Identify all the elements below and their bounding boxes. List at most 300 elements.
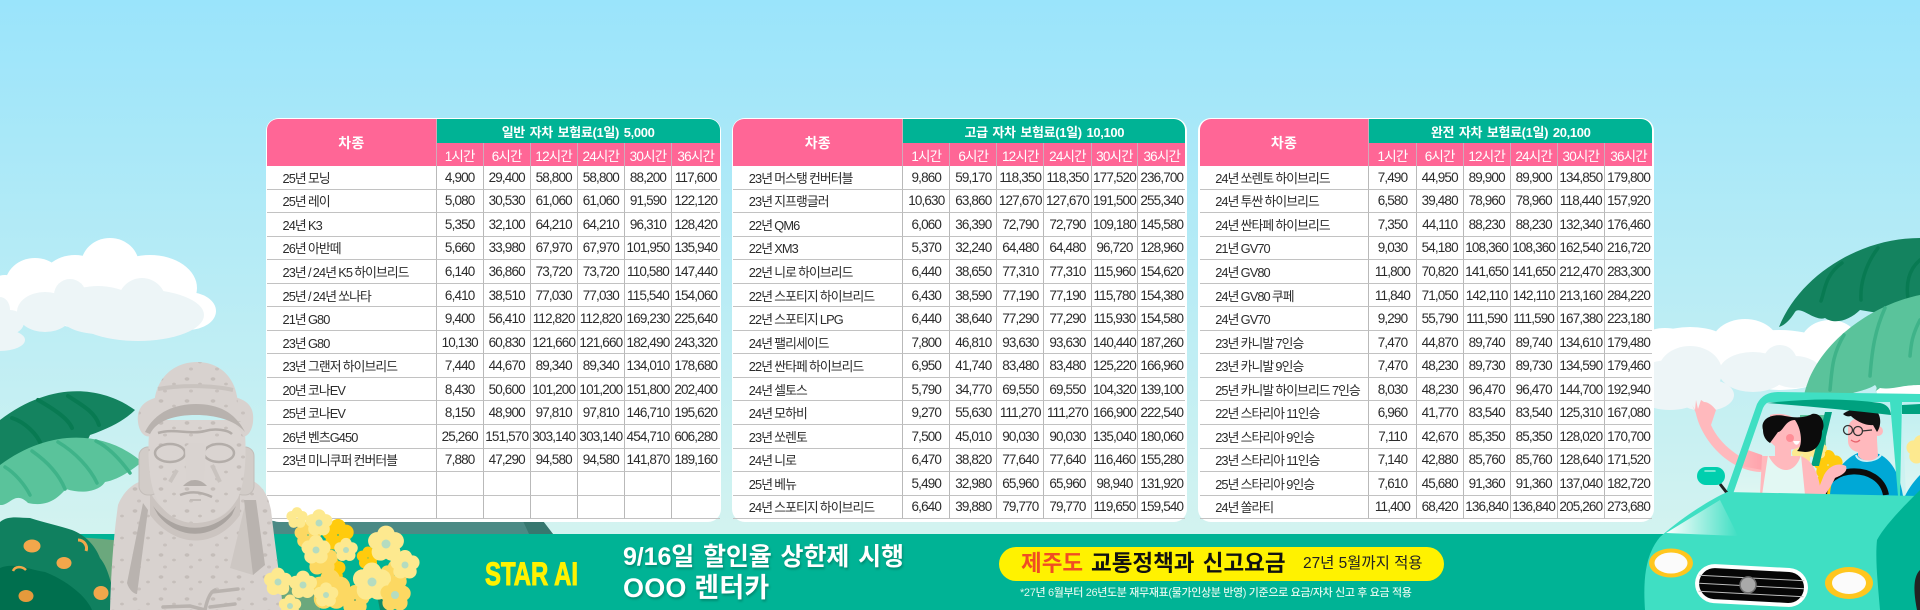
footnote: *27년 6월부터 26년도분 재무재표(물가인상분 반영) 기준으로 요금/자차 신고 후 요금 적용 xyxy=(1020,587,1412,599)
rate rows: full coverage: 89,740 xyxy=(1516,335,1552,350)
rate rows: full coverage: 78,960 xyxy=(1516,193,1552,208)
rate rows: general: 89,340 xyxy=(583,358,619,373)
rate rows: premium: 41,740 xyxy=(955,358,991,373)
rate rows: premium: 32,980 xyxy=(955,476,991,491)
rate rows: full coverage: 91,360 xyxy=(1516,476,1552,491)
rate rows: general: 33,980 xyxy=(489,240,525,255)
rate rows: general: 5,080 xyxy=(445,193,474,208)
table header: full coverage: 24시간 xyxy=(1515,148,1552,164)
rate rows: premium: 72,790 xyxy=(1002,217,1038,232)
rate rows: full coverage: 8,030 xyxy=(1378,382,1407,397)
table header: full coverage: 완전 자차 보험료(1일) 20,100 xyxy=(1431,124,1591,140)
hands xyxy=(163,589,238,610)
rate rows: full coverage: 9,290 xyxy=(1378,311,1407,326)
left clouds xyxy=(0,238,216,351)
rate rows: general: 115,540 xyxy=(627,288,669,302)
rate rows: general: 117,600 xyxy=(675,170,717,185)
rate rows: premium: 63,860 xyxy=(955,193,991,208)
rate rows: premium: 5,490 xyxy=(912,476,941,491)
rate rows: premium: 155,280 xyxy=(1140,452,1183,467)
rate rows: premium: 23년 쏘렌토 xyxy=(749,430,807,445)
rate rows: premium: 93,630 xyxy=(1049,335,1086,350)
body xyxy=(110,478,283,610)
rate rows: full coverage: 108,360 xyxy=(1512,240,1555,255)
rate rows: general: 58,800 xyxy=(583,170,619,185)
rate rows: full coverage: 108,360 xyxy=(1465,240,1508,255)
rate rows: general: 101,200 xyxy=(579,382,622,397)
rate rows: premium: 38,590 xyxy=(955,288,991,302)
left arm band xyxy=(127,503,148,594)
icon: rapeseed flowers xyxy=(264,507,420,610)
rate rows: full coverage: 83,540 xyxy=(1469,405,1505,420)
rate rows: general: 36,860 xyxy=(489,264,525,279)
rate rows: premium: 25년 베뉴 xyxy=(749,477,796,492)
rate rows: general: 61,060 xyxy=(583,193,619,208)
rate rows: premium: 127,670 xyxy=(999,193,1042,208)
rate rows: premium: 38,820 xyxy=(955,452,991,467)
side mirror xyxy=(1697,467,1727,493)
rate rows: premium: 72,790 xyxy=(1049,217,1086,232)
rate rows: full coverage: 11,800 xyxy=(1375,264,1410,279)
rate rows: general: 26년 벤츠G450 xyxy=(282,430,357,445)
rate rows: general: 25년 레이 xyxy=(282,194,330,209)
table header: premium: 1시간 xyxy=(911,148,941,164)
darker fender xyxy=(1876,490,1920,610)
rate rows: premium: 115,930 xyxy=(1094,311,1135,326)
eyes and nose xyxy=(155,444,234,462)
rate rows: premium: 6,950 xyxy=(912,358,941,373)
rate rows: general: 91,590 xyxy=(630,193,666,208)
rate rows: general: 303,140 xyxy=(532,429,575,444)
collar shadow xyxy=(150,492,240,541)
rate rows: premium: 154,620 xyxy=(1140,264,1183,279)
rate rows: premium: 6,060 xyxy=(912,217,941,232)
table header: full coverage: 36시간 xyxy=(1610,148,1647,164)
rate rows: premium: 83,480 xyxy=(1002,358,1038,373)
rate rows: full coverage: 7,110 xyxy=(1378,429,1407,444)
rate rows: premium: 6,440 xyxy=(912,264,941,279)
rate rows: full coverage: 78,960 xyxy=(1469,193,1505,208)
rate rows: premium: 125,220 xyxy=(1093,358,1136,373)
rate rows: full coverage xyxy=(1200,166,1652,519)
rate rows: premium: 24년 니로 xyxy=(749,453,796,468)
rate rows: general: 24년 K3 xyxy=(282,218,322,233)
rate rows: general: 128,420 xyxy=(674,217,717,232)
rate rows: full coverage: 24년 GV80 xyxy=(1215,265,1270,280)
rate rows: full coverage: 7,470 xyxy=(1378,335,1407,350)
rate rows: general: 30,530 xyxy=(489,193,525,208)
table header: full coverage: 6시간 xyxy=(1425,148,1455,164)
left banana leaves xyxy=(0,391,142,505)
rate rows: premium: 10,630 xyxy=(908,193,944,208)
rate rows: full coverage: 23년 스타리아 9인승 xyxy=(1215,430,1314,445)
rate rows: full coverage: 6,960 xyxy=(1378,405,1407,420)
rate rows: premium: 109,180 xyxy=(1093,217,1136,232)
rate rows: general: 303,140 xyxy=(579,429,622,444)
rate rows: general: 5,660 xyxy=(445,240,474,255)
rate rows: full coverage: 42,670 xyxy=(1422,429,1458,444)
steering wheel xyxy=(1824,471,1886,495)
rate rows: full coverage: 89,730 xyxy=(1469,358,1505,373)
rate rows: general: 23년 그랜저 하이브리드 xyxy=(282,359,397,374)
rate rows: general: 5,350 xyxy=(445,217,474,232)
rate rows: full coverage: 6,580 xyxy=(1378,193,1407,208)
rate rows: full coverage: 44,870 xyxy=(1422,335,1458,350)
rate rows: full coverage: 141,650 xyxy=(1465,264,1508,279)
rate rows: premium: 22년 싼타페 하이브리드 xyxy=(749,359,863,374)
rate rows: premium: 98,940 xyxy=(1096,476,1133,491)
rate rows: full coverage: 88,230 xyxy=(1469,217,1505,232)
rate rows: premium: 6,440 xyxy=(912,311,941,326)
table header: general xyxy=(267,119,720,166)
rate rows: general: 25년 모닝 xyxy=(282,171,330,186)
rate rows: premium: 159,540 xyxy=(1140,499,1183,514)
rate rows: premium: 180,060 xyxy=(1140,429,1183,444)
rate rows: general: 73,720 xyxy=(583,264,619,279)
rate rows: premium: 65,960 xyxy=(1002,476,1038,491)
rate rows: full coverage: 41,770 xyxy=(1422,405,1458,420)
rate rows: general: 121,660 xyxy=(532,335,575,350)
rate rows: general: 23년 / 24년 K5 하이브리드 xyxy=(282,265,409,280)
rate rows: premium: 6,430 xyxy=(912,288,941,302)
rate rows: premium: 9,270 xyxy=(912,405,941,420)
table header: general: 24시간 xyxy=(582,148,619,164)
rate rows: full coverage: 24년 GV70 xyxy=(1215,312,1270,327)
rate rows: premium: 116,460 xyxy=(1094,452,1135,467)
low hill on the left xyxy=(70,537,320,610)
rate rows: full coverage: 71,050 xyxy=(1422,288,1458,302)
right headlight xyxy=(1825,567,1873,599)
rate rows: full coverage: 170,700 xyxy=(1607,429,1650,444)
rate rows: general: 38,510 xyxy=(489,288,525,302)
rate rows: premium: 77,310 xyxy=(1049,264,1086,279)
deep yellow blossoms xyxy=(319,519,379,582)
man xyxy=(1830,408,1903,496)
rate rows: premium: 24년 팰리세이드 xyxy=(749,336,829,351)
rate rows: general: 6,410 xyxy=(445,288,474,302)
rate rows: general: 32,100 xyxy=(489,217,525,232)
rate rows: full coverage: 96,470 xyxy=(1469,382,1505,397)
rate rows: full coverage: 136,840 xyxy=(1512,499,1555,514)
rate rows: full coverage: 22년 스타리아 11인승 xyxy=(1215,406,1320,421)
hat brim xyxy=(138,393,253,436)
rate rows: general: 134,010 xyxy=(627,358,669,373)
rate rows: general: 44,670 xyxy=(489,358,525,373)
tangerine bush xyxy=(0,517,118,610)
rate rows: full coverage: 23년 카니발 9인승 xyxy=(1215,359,1303,374)
rate rows: premium: 5,370 xyxy=(912,240,941,255)
rate rows: full coverage: 128,640 xyxy=(1559,452,1602,467)
rate rows: premium: 22년 XM3 xyxy=(749,241,798,256)
table header: general: 12시간 xyxy=(535,148,572,164)
rate rows: full coverage: 7,610 xyxy=(1378,476,1407,491)
callout: yellow policy pill xyxy=(999,547,1444,581)
table header: full coverage: 1시간 xyxy=(1378,148,1407,164)
rate rows: premium: 90,030 xyxy=(1002,429,1038,444)
rate rows: full coverage: 24년 싼타페 하이브리드 xyxy=(1215,218,1330,233)
car body xyxy=(1644,492,1920,610)
leaf seen through windshield xyxy=(1800,415,1826,450)
rate rows: full coverage: 134,610 xyxy=(1559,335,1602,350)
rate rows: general: 58,800 xyxy=(536,170,572,185)
rate rows: general: 77,030 xyxy=(583,288,619,302)
rate rows: general: 9,400 xyxy=(445,311,474,326)
rate rows: general: 56,410 xyxy=(489,311,525,326)
rate rows: full coverage: 128,020 xyxy=(1559,429,1602,444)
rate rows: premium: 69,550 xyxy=(1049,382,1086,397)
rate rows: full coverage: 7,350 xyxy=(1378,217,1407,232)
rate rows: premium: 166,900 xyxy=(1093,405,1136,420)
windshield glass xyxy=(1733,402,1899,496)
rate rows: general: 195,620 xyxy=(674,405,717,420)
rate rows: premium: 93,630 xyxy=(1002,335,1038,350)
table header: premium: 6시간 xyxy=(958,148,988,164)
right banana leaves xyxy=(1779,238,1920,420)
rate rows: full coverage: 85,760 xyxy=(1516,452,1552,467)
icon: dol hareubang statue xyxy=(110,362,283,610)
rate rows: premium: 115,960 xyxy=(1094,264,1135,279)
rate rows: full coverage: 7,140 xyxy=(1378,452,1407,467)
rate rows: general: 7,880 xyxy=(445,452,474,467)
rate rows: general: 94,580 xyxy=(583,452,619,467)
rate rows: full coverage: 142,110 xyxy=(1466,288,1508,302)
rate rows: general: 169,230 xyxy=(627,311,669,326)
table header: premium: 24시간 xyxy=(1049,148,1086,164)
rate rows: full coverage: 55,790 xyxy=(1422,311,1458,326)
left headlight xyxy=(1649,548,1693,578)
headline: discount cap notice: 9/16일 할인율 상한제 시행 xyxy=(623,543,904,571)
rate rows: premium: 55,630 xyxy=(955,405,991,420)
flowers through windshield xyxy=(1810,450,1843,499)
rate rows: general: 50,600 xyxy=(489,382,525,397)
table header: full coverage: 차종 xyxy=(1271,134,1297,150)
rate rows: full coverage: 42,880 xyxy=(1422,452,1458,467)
table header: full coverage: 30시간 xyxy=(1562,148,1599,164)
rate rows: full coverage: 284,220 xyxy=(1607,288,1650,302)
rate rows: general: 4,900 xyxy=(445,170,474,185)
ground band xyxy=(0,534,1920,610)
rate rows: full coverage: 24년 쏠라티 xyxy=(1215,500,1273,515)
table header: general: 1시간 xyxy=(445,148,475,164)
rate rows: premium: 77,310 xyxy=(1002,264,1038,279)
rate rows: full coverage: 7,470 xyxy=(1378,358,1407,373)
rate rows: general: 97,810 xyxy=(583,405,619,420)
rate rows: full coverage: 216,720 xyxy=(1607,240,1650,255)
rate rows: general: 112,820 xyxy=(580,311,622,326)
rate rows: premium: 22년 스포티지 하이브리드 xyxy=(749,288,874,304)
rate rows: full coverage: 39,480 xyxy=(1422,193,1458,208)
rate rows: premium: 24년 스포티지 하이브리드 xyxy=(749,500,874,515)
rate rows: premium: 69,550 xyxy=(1002,382,1038,397)
rate rows: premium: 128,960 xyxy=(1140,240,1183,255)
rate rows: general: 61,060 xyxy=(536,193,572,208)
roof and pillars xyxy=(1726,392,1920,494)
rate rows: premium: 6,470 xyxy=(912,452,941,467)
rate rows: full coverage: 182,720 xyxy=(1607,476,1650,491)
rate rows: general: 60,830 xyxy=(489,335,525,350)
rate rows: full coverage: 23년 스타리아 11인승 xyxy=(1215,453,1320,468)
rate rows: full coverage: 21년 GV70 xyxy=(1215,241,1270,256)
table header: premium: 차종 xyxy=(805,134,831,150)
rate rows: general: 101,200 xyxy=(532,382,575,397)
rate rows: full coverage: 89,900 xyxy=(1516,170,1552,185)
right arm band xyxy=(230,505,265,575)
rate rows: full coverage: 24년 GV80 쿠페 xyxy=(1215,288,1294,304)
rate rows: premium: 111,270 xyxy=(1000,405,1041,420)
rate rows: general: 182,490 xyxy=(627,335,669,350)
rate rows: full coverage: 44,950 xyxy=(1422,170,1458,185)
rate rows: full coverage: 7,490 xyxy=(1378,170,1407,185)
rate rows: general: 225,640 xyxy=(674,311,717,326)
rate rows: premium: 177,520 xyxy=(1093,170,1136,185)
rate rows: general: 94,580 xyxy=(536,452,572,467)
rate rows: full coverage: 273,680 xyxy=(1607,499,1650,514)
rate rows: premium: 65,960 xyxy=(1049,476,1086,491)
ears xyxy=(139,447,159,495)
rate rows: general: 96,310 xyxy=(630,217,666,232)
rate rows: full coverage: 179,460 xyxy=(1607,358,1650,373)
pill text: Jeju: 제주도 xyxy=(1021,551,1083,576)
rate rows: premium: 36,390 xyxy=(955,217,991,232)
rate rows: full coverage: 96,470 xyxy=(1516,382,1552,397)
rate rows: premium: 22년 니로 하이브리드 xyxy=(749,265,853,280)
rate rows: general: 88,200 xyxy=(630,170,666,185)
rate rows: full coverage: 283,300 xyxy=(1607,264,1650,279)
rate rows: full coverage: 89,900 xyxy=(1469,170,1505,185)
rate rows: premium: 79,770 xyxy=(1002,499,1038,514)
rate rows: premium: 90,030 xyxy=(1049,429,1086,444)
hat dome xyxy=(154,362,238,408)
rate rows: full coverage: 70,820 xyxy=(1422,264,1458,279)
rate rows: premium: 24년 모하비 xyxy=(749,406,807,421)
rate rows: premium: 77,640 xyxy=(1002,452,1038,467)
rate rows: premium: 39,880 xyxy=(955,499,991,514)
hood highlight xyxy=(1666,500,1738,536)
woman xyxy=(1692,400,1824,495)
rate rows: full coverage: 134,590 xyxy=(1559,358,1602,373)
rate rows: premium: 79,770 xyxy=(1049,499,1086,514)
rate rows: premium: 166,960 xyxy=(1140,358,1183,373)
rate rows: full coverage: 89,740 xyxy=(1469,335,1505,350)
rate rows: full coverage: 88,230 xyxy=(1516,217,1552,232)
rate rows: full coverage: 11,840 xyxy=(1375,288,1410,302)
rate rows: full coverage: 192,940 xyxy=(1607,382,1650,397)
rate rows: full coverage: 89,730 xyxy=(1516,358,1552,373)
hands on wheel xyxy=(1816,465,1846,495)
rate rows: premium: 154,580 xyxy=(1140,311,1183,326)
rate rows: premium: 140,440 xyxy=(1093,335,1136,350)
rate rows: full coverage: 25년 스타리아 9인승 xyxy=(1215,477,1314,492)
rate rows: general: 21년 G80 xyxy=(282,312,329,327)
rate rows: full coverage: 85,350 xyxy=(1516,429,1552,444)
rate rows: general: 64,210 xyxy=(536,217,572,232)
rate rows: general: 112,820 xyxy=(533,311,575,326)
table header: general: 6시간 xyxy=(492,148,522,164)
table header: premium: 30시간 xyxy=(1096,148,1133,164)
rate rows: general: 121,660 xyxy=(579,335,622,350)
rate rows: premium: 236,700 xyxy=(1140,170,1183,185)
rate rows: general: 178,680 xyxy=(674,358,717,373)
rate rows: general: 135,940 xyxy=(674,240,717,255)
brow xyxy=(158,430,232,434)
rate rows: full coverage: 85,760 xyxy=(1469,452,1505,467)
rate rows: full coverage: 157,920 xyxy=(1607,193,1650,208)
rate rows: premium: 119,650 xyxy=(1094,499,1135,514)
rate rows: general: 67,970 xyxy=(536,240,572,255)
rate rows: premium: 5,790 xyxy=(912,382,941,397)
rate rows: general: 151,800 xyxy=(627,382,669,397)
rate rows: general: 73,720 xyxy=(536,264,572,279)
rate rows: full coverage: 24년 투싼 하이브리드 xyxy=(1215,194,1319,209)
rate rows: full coverage: 48,230 xyxy=(1422,382,1458,397)
rate rows: general: 97,810 xyxy=(536,405,572,420)
rate rows: general: 23년 미니쿠퍼 컨버터블 xyxy=(282,453,397,468)
table header: general: 일반 자차 보험료(1일) 5,000 xyxy=(502,124,654,140)
rate rows: general: 8,430 xyxy=(445,382,474,397)
rate rows: full coverage: 44,110 xyxy=(1422,217,1457,232)
panel: premium insurance rate table xyxy=(732,118,1187,522)
rate rows: premium: 9,860 xyxy=(912,170,941,185)
rate rows: premium: 77,640 xyxy=(1049,452,1086,467)
rate rows: full coverage: 54,180 xyxy=(1422,240,1458,255)
rate rows: full coverage: 142,110 xyxy=(1513,288,1555,302)
rate rows: general: 25년 / 24년 쏘나타 xyxy=(282,288,371,304)
rate rows: general: 202,400 xyxy=(674,382,717,397)
rate rows: general: 64,210 xyxy=(583,217,619,232)
rate rows: full coverage: 212,470 xyxy=(1559,264,1602,279)
rate rows: premium: 139,100 xyxy=(1140,382,1183,397)
panel: full coverage insurance rate table xyxy=(1198,118,1654,522)
rate rows: premium: 22년 스포티지 LPG xyxy=(749,312,843,327)
rate rows: general xyxy=(267,166,720,519)
rate rows: premium: 59,170 xyxy=(955,170,991,185)
rate rows: general: 122,120 xyxy=(674,193,717,208)
center post xyxy=(1811,412,1832,466)
rate rows: general: 101,950 xyxy=(627,240,669,255)
icon: car with driver and passenger xyxy=(1644,392,1920,610)
table header: premium: 고급 자차 보험료(1일) 10,100 xyxy=(964,124,1124,140)
table header: full coverage: 12시간 xyxy=(1468,148,1505,164)
rate rows: general: 189,160 xyxy=(674,452,717,467)
rate rows: full coverage: 83,540 xyxy=(1516,405,1552,420)
passenger in rear window xyxy=(1905,435,1920,496)
rate rows: premium: 77,290 xyxy=(1002,311,1038,326)
rate rows: general: 48,900 xyxy=(489,405,525,420)
rate rows: full coverage: 25년 카니발 하이브리드 7인승 xyxy=(1215,383,1360,398)
rate rows: general: 147,440 xyxy=(674,264,717,279)
grille xyxy=(1694,563,1809,608)
rate rows: premium: 127,670 xyxy=(1046,193,1089,208)
rate rows: general: 151,570 xyxy=(485,429,528,444)
rate rows: premium: 7,800 xyxy=(912,335,941,350)
rate rows: general: 23년 G80 xyxy=(282,336,329,351)
table header: premium: 36시간 xyxy=(1143,148,1180,164)
rate rows: premium: 131,920 xyxy=(1140,476,1183,491)
rate rows: premium: 6,640 xyxy=(912,499,941,514)
rate rows: full coverage: 176,460 xyxy=(1607,217,1650,232)
rate rows: premium: 34,770 xyxy=(955,382,991,397)
rate rows: general: 25년 코나EV xyxy=(282,406,345,421)
second window xyxy=(1902,402,1920,496)
rate rows: full coverage: 136,840 xyxy=(1465,499,1508,514)
rate rows: general: 29,400 xyxy=(489,170,525,185)
rate rows: premium: 64,480 xyxy=(1002,240,1038,255)
rate rows: full coverage: 48,230 xyxy=(1422,358,1458,373)
rate rows: full coverage: 11,400 xyxy=(1375,499,1410,514)
rate rows: premium: 22년 QM6 xyxy=(749,218,799,233)
rate rows: full coverage: 111,590 xyxy=(1513,311,1554,326)
rate rows: premium: 83,480 xyxy=(1049,358,1086,373)
